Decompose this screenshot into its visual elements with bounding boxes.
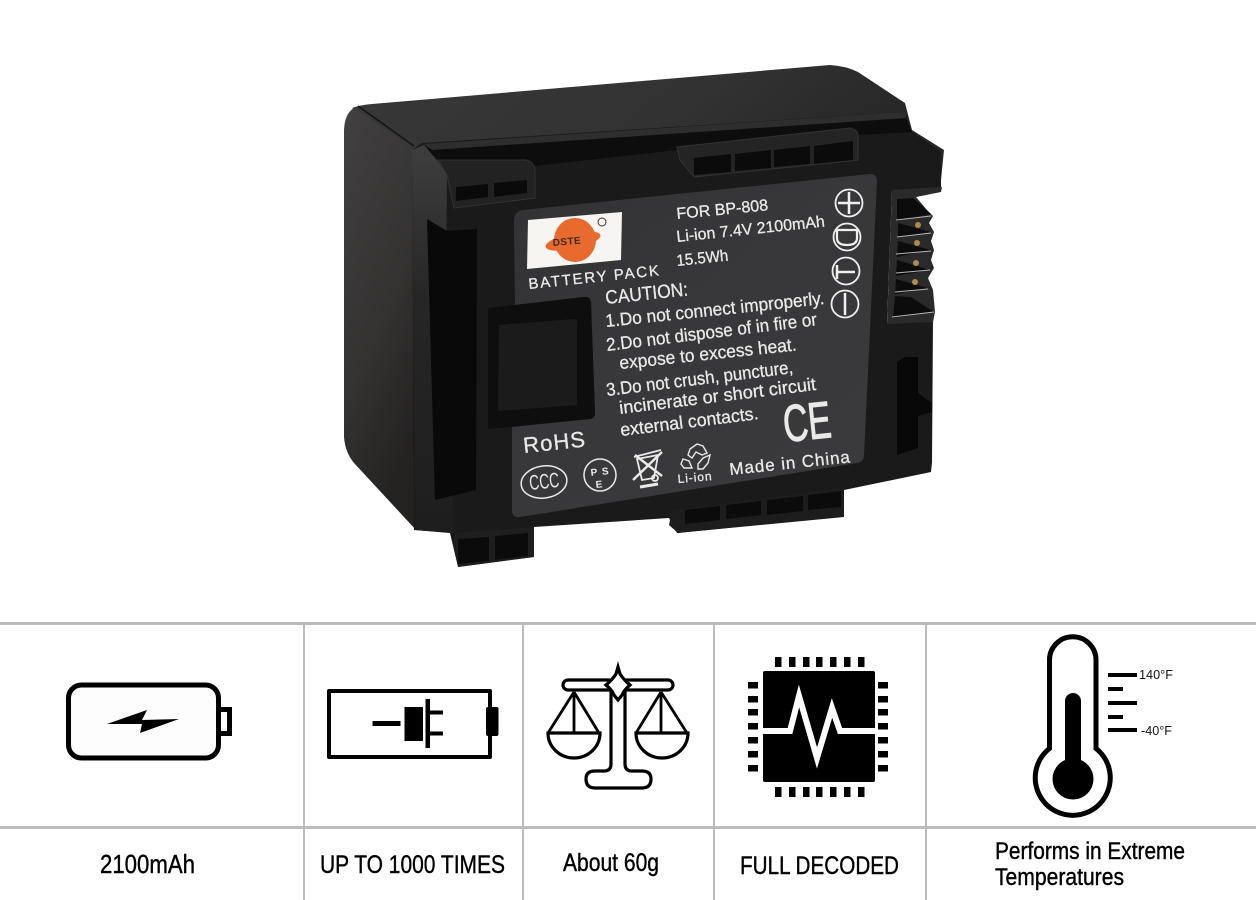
CCC mark: CCC <box>528 469 560 495</box>
icon: thermometer <box>1035 637 1173 815</box>
caption: capacity: 2100mAh <box>100 849 195 879</box>
label text: CAUTION: <box>604 279 689 309</box>
caption: temperature: Temperatures <box>995 864 1124 891</box>
PSE mark: E <box>595 479 603 491</box>
caption: temperature <box>995 838 1185 891</box>
label text: BATTERY PACK <box>528 262 660 293</box>
icon: recycling <box>681 444 710 469</box>
DSTE logo <box>527 212 622 269</box>
label text <box>522 197 851 486</box>
label text: RoHS <box>522 427 586 458</box>
icon: decoder chip <box>748 657 888 797</box>
bottom centre clip <box>669 488 844 533</box>
right side recess <box>897 357 932 455</box>
DSTE logo: DSTE <box>552 236 581 249</box>
label text: external contacts. <box>619 403 759 440</box>
icon: charged battery <box>68 685 230 758</box>
top left clip <box>438 160 535 208</box>
label text: incinerate or short circuit <box>618 374 817 418</box>
PSE mark <box>584 459 616 491</box>
label text: Li-ion <box>677 469 712 486</box>
caption: weight: About 60g <box>563 849 659 877</box>
label text: 1.Do not connect improperly. <box>604 288 825 331</box>
label text: Made in China <box>728 447 851 479</box>
icon: crossed-out bin <box>633 450 662 487</box>
icon: thermometer: -40°F <box>1141 724 1172 738</box>
left strip <box>412 145 454 533</box>
label text: 15.5Wh <box>676 248 729 270</box>
top centre clip <box>677 128 858 177</box>
CCC mark <box>519 463 569 501</box>
icon: cycle battery <box>329 691 498 757</box>
label plate <box>512 174 877 517</box>
bottom left clip <box>454 527 534 567</box>
label text: 2.Do not dispose of in fire or <box>605 309 818 355</box>
top face <box>352 65 944 200</box>
label text: FOR BP-808 <box>676 197 769 223</box>
caption: decoding: FULL DECODED <box>740 852 899 880</box>
caption: temperature: Performs in Extreme <box>995 838 1185 865</box>
front body <box>412 112 941 567</box>
electrical symbols <box>832 190 862 318</box>
PSE mark: PS <box>590 466 610 479</box>
label text: expose to excess heat. <box>618 334 797 373</box>
front shadow channel <box>425 115 912 170</box>
label text: Li-ion 7.4V 2100mAh <box>676 213 826 246</box>
icon: balance scale <box>548 667 688 788</box>
left recess <box>427 219 477 500</box>
corner chamfer <box>358 106 414 146</box>
label text: 3.Do not crush, puncture, <box>605 357 794 400</box>
left face <box>344 108 416 530</box>
comparison table grid <box>0 623 1256 900</box>
label text: CE <box>780 391 834 454</box>
caption: cycles: UP TO 1000 TIMES <box>320 851 505 879</box>
connector housing <box>887 187 942 324</box>
icon: thermometer: 140°F <box>1139 668 1173 682</box>
square recess <box>488 297 595 429</box>
battery photo <box>344 65 944 567</box>
top ridge <box>424 112 906 150</box>
